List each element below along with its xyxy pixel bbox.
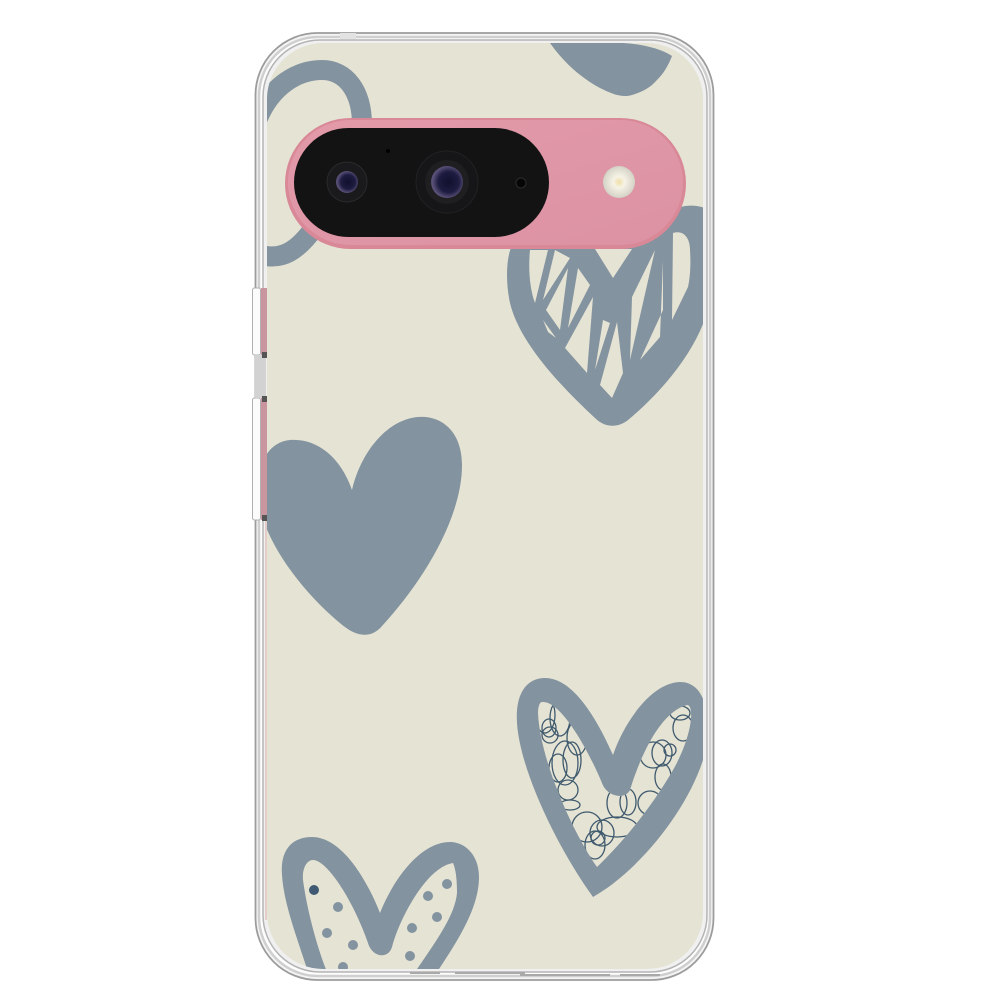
pink bar face <box>288 120 683 245</box>
scribble heart lower right <box>517 678 708 897</box>
striped heart right <box>507 206 710 426</box>
heart body <box>507 206 710 426</box>
camera bar <box>285 118 686 249</box>
polka dots <box>309 879 452 972</box>
cream back panel <box>267 43 703 969</box>
flash <box>603 166 635 198</box>
main lens <box>416 151 478 213</box>
side buttons <box>252 288 267 920</box>
sensor <box>516 178 526 188</box>
ring heart top left <box>258 70 362 256</box>
heart outline <box>282 837 479 972</box>
microphone dot <box>386 149 390 153</box>
pink bar rim <box>285 118 686 249</box>
phone case product image <box>252 32 714 981</box>
solid heart top right <box>550 43 672 96</box>
large solid heart <box>258 417 462 635</box>
scribble lines <box>535 697 693 859</box>
heart patterns <box>258 43 710 972</box>
dotted heart bottom left <box>282 837 479 972</box>
cut-out stripes <box>529 232 690 398</box>
clear case outer shell <box>256 33 714 980</box>
heart outline <box>517 678 708 897</box>
black camera window <box>294 128 549 237</box>
ultrawide lens <box>327 162 367 202</box>
